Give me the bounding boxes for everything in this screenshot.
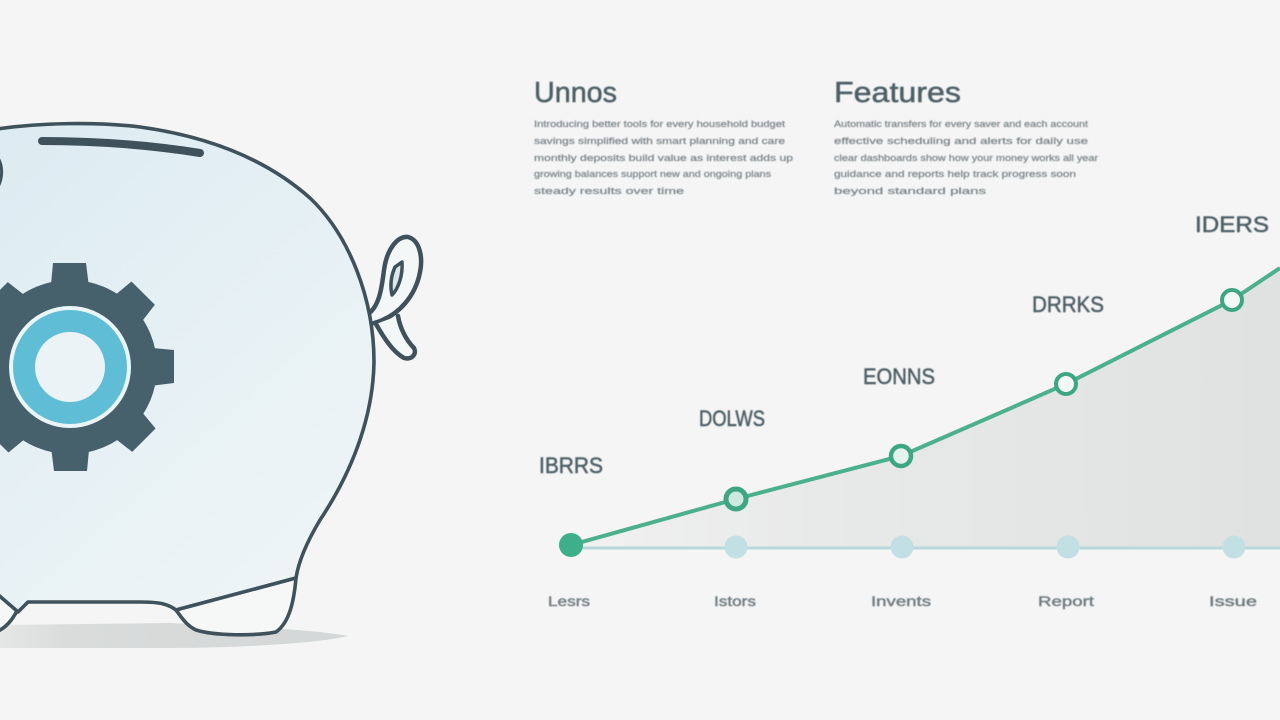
value labels: DOLWS: [699, 406, 765, 431]
area under line: [571, 268, 1280, 547]
body text: left column: growing balances support new and ongoing plans: [534, 169, 772, 179]
body text: left column: monthly deposits build value as interest adds up: [534, 153, 793, 163]
front leg: [0, 593, 17, 632]
body text: left column: savings simplified with smart planning and care: [534, 136, 785, 146]
icon: gear: [0, 263, 174, 471]
heading: right column: Features: [834, 77, 961, 109]
baseline markers: [724, 536, 1246, 558]
pig body: [0, 124, 374, 612]
value labels: [539, 212, 1269, 478]
value labels: IBRRS: [539, 453, 603, 478]
axis labels: Invents: [871, 593, 931, 609]
heading: left column: Unnos: [534, 77, 617, 109]
body text: left column: steady results over time: [534, 186, 684, 196]
piggy bank illustration: [0, 124, 421, 648]
body text: left column: Introducing better tools for every household budget: [534, 119, 786, 129]
axis labels: Issue: [1209, 593, 1257, 609]
baseline: [571, 546, 1280, 550]
hind leg: [176, 578, 296, 635]
eye arc: [0, 155, 2, 190]
value labels: IDERS: [1195, 212, 1269, 237]
body text: right column: clear dashboards show how your money works all year: [834, 153, 1098, 163]
body text: left column: [534, 119, 793, 196]
text block: left column: [534, 77, 793, 196]
value labels: DRRKS: [1032, 292, 1104, 317]
pig tail: [368, 237, 421, 358]
text block: right column: [834, 77, 1098, 196]
axis labels: Report: [1038, 593, 1094, 609]
body text: right column: guidance and reports help track progress soon: [834, 169, 1076, 179]
value labels: EONNS: [863, 364, 935, 389]
growth line: [571, 268, 1280, 545]
axis labels: Lesrs: [548, 593, 590, 609]
body text: right column: beyond standard plans: [834, 186, 987, 196]
body text: right column: [834, 119, 1098, 196]
line chart: [539, 212, 1280, 609]
data points: [559, 290, 1242, 557]
axis labels: Istors: [714, 593, 756, 609]
body text: right column: effective scheduling and alerts for daily use: [834, 136, 1088, 146]
coin slot: [42, 141, 200, 153]
axis labels: [548, 593, 1257, 609]
body text: right column: Automatic transfers for every saver and each account: [834, 119, 1089, 129]
ground shadow: [0, 623, 348, 648]
